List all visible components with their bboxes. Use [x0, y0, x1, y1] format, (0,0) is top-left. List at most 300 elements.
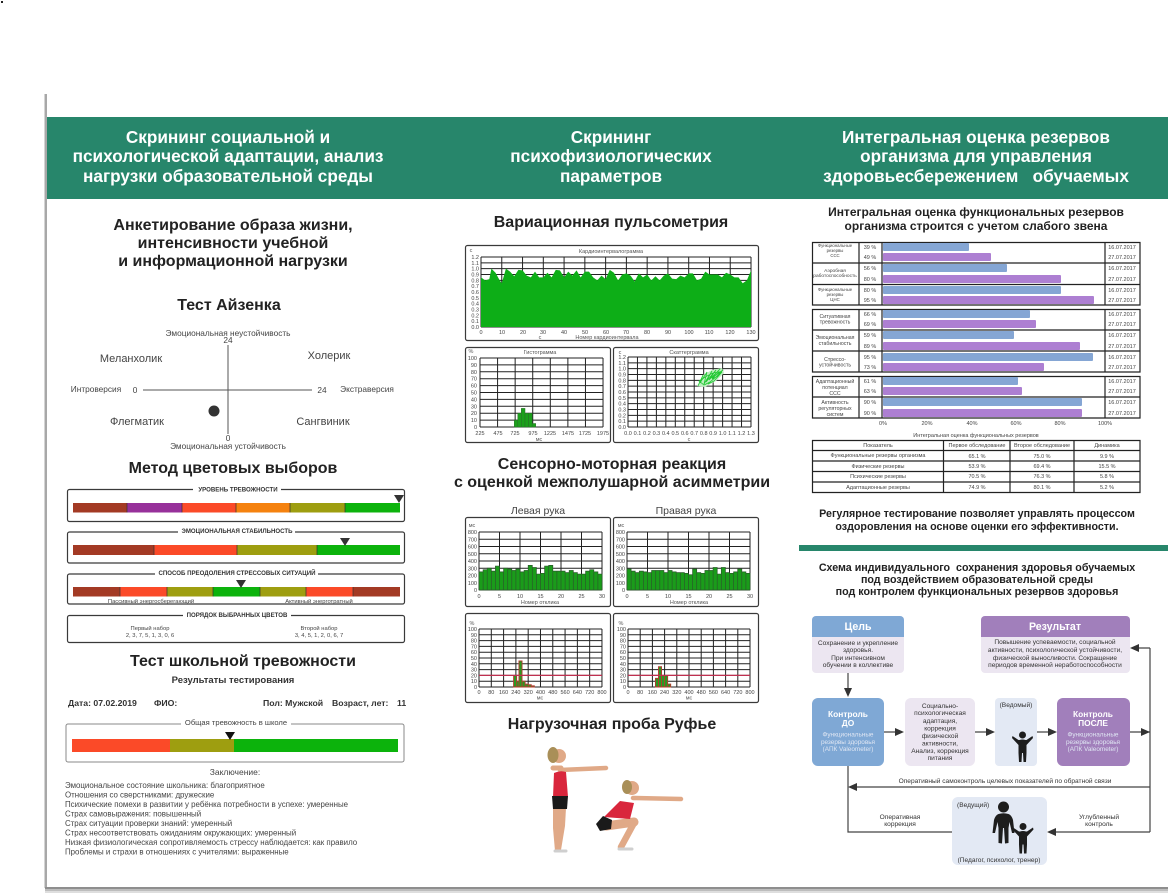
chart: left hand histogram: 240 — [511, 690, 520, 696]
marker: result dot — [208, 406, 220, 416]
bars: second survey — [883, 253, 1094, 417]
chart: right hand reaction times: 15 — [685, 594, 692, 600]
chart: scattergram: с — [619, 350, 622, 356]
label: deep control: контроль — [1085, 821, 1113, 828]
box: correction activities: физической — [922, 732, 959, 740]
heading: Ruffier load test: Нагрузочная проба Руфье — [508, 716, 716, 733]
dates: 16.07.2017 — [1108, 400, 1136, 406]
chart: right hand histogram: % — [619, 621, 624, 627]
row labels: ЦНС — [830, 297, 840, 302]
chart: left hand histogram: 560 — [561, 690, 570, 696]
chart: right hand reaction times: 5 — [646, 594, 649, 600]
chart: cardiointervalogram: с — [470, 248, 473, 254]
chart: right hand histogram: 80 — [620, 639, 626, 645]
panel: anxiety level: УРОВЕНЬ ТРЕВОЖНОСТИ — [198, 486, 278, 494]
icon: child — [1012, 732, 1033, 762]
row labels: регуляторных — [818, 406, 852, 412]
chart: scattergram: 0.4 — [618, 402, 626, 408]
label: left hand: Левая рука — [511, 505, 565, 517]
chart: left hand reaction times: 700 — [468, 537, 477, 543]
box: result: Результат — [1029, 621, 1081, 633]
chart: histogram: 30 — [471, 404, 477, 410]
dates: 27.07.2017 — [1108, 277, 1136, 283]
chart: scattergram: 0.7 — [618, 384, 626, 390]
chart: scattergram: 1.1 — [728, 431, 736, 437]
chart: right hand reaction times: 25 — [726, 594, 733, 600]
box: correction activities: Анализ, коррекция — [911, 748, 969, 755]
chart: right hand reaction times: 30 — [747, 594, 753, 600]
chart: left hand histogram: 10 — [471, 679, 477, 685]
header: column 3: Интегральная оценка резервов — [842, 127, 1110, 147]
marker: stability triangle — [340, 538, 350, 546]
table: integral reserves: 5.2 % — [1100, 485, 1114, 491]
text: conclusion: Заключение: — [210, 767, 260, 777]
heading: pulse variation: Вариационная пульсометрия — [494, 214, 728, 231]
table: integral reserves: 74.9 % — [968, 485, 986, 491]
heading: scheme: Схема индивидуального сохранения здоровья обучаемых — [819, 562, 1135, 574]
axis: 100% — [1098, 421, 1112, 427]
icon: adult — [992, 802, 1014, 844]
chart: histogram: 60 — [471, 384, 477, 390]
box: correction activities — [905, 698, 975, 766]
row labels: устойчивость — [819, 362, 851, 368]
chart: left hand histogram: 160 — [499, 690, 508, 696]
chart: histogram: 1975 — [597, 431, 609, 437]
heading: integral assessment: организма строится с учетом слабого звена — [845, 219, 1108, 233]
chart: cardiointervalogram: 0.1 — [471, 319, 479, 325]
box: goal: При интенсивном — [831, 655, 885, 662]
box: control before: резервы здоровья — [821, 739, 876, 746]
chart: left hand histogram: % — [470, 621, 475, 627]
chart: left hand histogram: 70 — [471, 644, 477, 650]
heading: integral assessment: Интегральная оценка функциональных резервов — [828, 205, 1124, 219]
chart: Eysenck circle axes: Холерик — [308, 350, 351, 362]
chart: histogram: 475 — [493, 431, 503, 437]
heading: hemispheric asymmetry: с оценкой межполушарной асимметрии — [454, 474, 770, 491]
box: result — [981, 616, 1130, 673]
text: conclusion: Психические помехи в развитии у ребёнка потребности в успехе: умеренные — [65, 800, 349, 809]
chart: left hand histogram: 0 — [474, 685, 477, 691]
chart: scattergram: 0.2 — [618, 413, 626, 419]
label: operative correction: коррекция — [884, 821, 916, 828]
chart: cardiointervalogram: 0.4 — [471, 302, 479, 308]
label: feedback: Оперативный самоконтроль целевых показателей по обратной связи — [899, 777, 1112, 785]
chart: right hand reaction times: Номер отклика — [670, 600, 709, 606]
axis: 40% — [966, 421, 978, 427]
chart: cardiointervalogram: 50 — [582, 330, 588, 336]
diagram: health reserve control scheme — [812, 616, 1150, 865]
panel: stress coping: СПОСОБ ПРЕОДОЛЕНИЯ СТРЕССОВЫХ СИТУАЦИЙ — [159, 569, 315, 577]
chart: Eysenck circle axes: Эмоциональная неустойчивость — [166, 328, 290, 338]
text: conclusion: Проблемы и страхи в отношениях с учителями: выраженные — [65, 848, 289, 856]
header: column 1: Скрининг социальной и — [126, 127, 330, 147]
chart: right hand histogram: 400 — [684, 690, 694, 696]
chart: left hand reaction times: 400 — [468, 559, 477, 565]
percent values: 90 % — [864, 400, 876, 406]
percent values: 89 % — [864, 344, 876, 350]
row labels: Функциональные — [818, 287, 853, 292]
chart: cardiointervalogram: 70 — [623, 330, 629, 336]
label: deep control: Углубленный — [1079, 813, 1119, 821]
chart: cardiointervalogram — [466, 246, 758, 341]
chart: left hand reaction times: 15 — [537, 594, 544, 600]
label: right hand: Правая рука — [656, 505, 717, 517]
panel: emotional stability — [68, 528, 404, 563]
text: respondent info — [68, 698, 406, 708]
chart: right hand histogram: мс — [686, 696, 693, 702]
box: control before: ДО — [842, 718, 855, 728]
chart: Eysenck circle axes — [71, 328, 394, 451]
chart: cardiointervalogram: 60 — [603, 330, 609, 336]
chart: left hand histogram: 20 — [471, 673, 477, 679]
row labels: Адаптационный — [816, 378, 854, 385]
header: column 2: Скрининг — [571, 127, 651, 147]
chart: right hand histogram: 30 — [620, 668, 626, 674]
header: column 1: нагрузки образовательной среды — [83, 166, 373, 186]
dates: 27.07.2017 — [1108, 255, 1136, 261]
chart: cardiointervalogram: 30 — [540, 330, 546, 336]
percent values: 69 % — [864, 322, 876, 328]
chart: cardiointervalogram: 110 — [705, 330, 713, 336]
box: correction activities: психологическая — [914, 710, 966, 717]
chart: cardiointervalogram: 10 — [499, 330, 505, 336]
row labels: резервы — [827, 292, 843, 297]
panel: stress coping: Пассивный энергосберегающий — [108, 598, 194, 605]
percent values: 56 % — [864, 266, 876, 272]
header: column 3: здоровьесбережением обучаемых — [823, 166, 1129, 186]
chart: scattergram: 0.4 — [662, 431, 670, 437]
row labels: Ситуативная — [820, 314, 851, 320]
row labels: Аэробная — [824, 268, 846, 274]
chart: right hand reaction times: 700 — [616, 537, 625, 543]
table: integral reserves: 70.5 % — [968, 474, 986, 480]
percent values: 61 % — [864, 379, 876, 385]
chart: histogram: 20 — [471, 411, 477, 417]
row labels: Эмоциональная — [816, 335, 855, 341]
chart: left hand reaction times: 0 — [477, 594, 481, 600]
chart: histogram: 1475 — [562, 431, 574, 437]
box: result: периодов временной неработоспособности — [988, 661, 1122, 669]
chart: right hand reaction times — [614, 518, 758, 606]
table: integral reserves: 69.4 % — [1033, 464, 1051, 470]
text: conclusion: Страх несоответствовать ожиданиям окружающих: умеренный — [65, 828, 296, 838]
chart: cardiointervalogram: с — [539, 335, 542, 341]
box: goal: обучении в коллективе — [823, 661, 894, 669]
chart: scattergram: 1.1 — [618, 361, 626, 367]
dates: 16.07.2017 — [1108, 312, 1136, 318]
box: correction activities: адаптация, — [923, 718, 957, 725]
chart: left hand histogram — [466, 614, 610, 702]
percent values — [864, 245, 876, 417]
chart: scattergram: 0.3 — [618, 408, 626, 414]
heading: school anxiety test: Тест школьной тревожности — [130, 653, 356, 670]
table: integral reserves: 5.8 % — [1100, 474, 1114, 480]
marker: coping triangle — [236, 580, 246, 588]
table: integral reserves: Физические резервы — [851, 464, 905, 470]
box: follower: (Ведомый) — [1000, 701, 1032, 709]
chart: scattergram: Скаттерграмма — [669, 350, 710, 356]
illustration: squat exercise — [548, 747, 681, 851]
chart: right hand histogram: 70 — [620, 644, 626, 650]
chart: right hand reaction times: 0 — [625, 594, 629, 600]
chart: scattergram: 0.8 — [618, 378, 626, 384]
dates: 27.07.2017 — [1108, 298, 1136, 304]
chart: scattergram: 0.7 — [690, 431, 698, 437]
box: control after — [1057, 698, 1130, 766]
chart: right hand histogram: 40 — [620, 662, 626, 668]
box: control before: Контроль — [828, 709, 868, 719]
figure: standing woman — [548, 747, 606, 851]
box: goal: здоровья. — [843, 647, 873, 654]
chart: cardiointervalogram: 0.0 — [471, 325, 479, 331]
chart: histogram: 40 — [471, 397, 477, 403]
chart: right hand reaction times: 10 — [665, 594, 671, 600]
chart: left hand histogram: 640 — [573, 690, 582, 696]
chart: right hand histogram — [614, 614, 758, 702]
text: regular testing note: Регулярное тестирование позволяет управлять процессом — [819, 508, 1135, 520]
heading: lifestyle survey: Анкетирование образа жизни, — [113, 217, 353, 234]
header: column 2: психофизиологических — [510, 146, 712, 166]
chart: left hand histogram: 40 — [471, 662, 477, 668]
chart: cardiointervalogram: 0.9 — [471, 272, 479, 278]
box: control after: (АПК Valeometer) — [1068, 746, 1118, 753]
chart: histogram: 10 — [471, 418, 477, 424]
header band — [47, 117, 1168, 199]
table: integral reserves: 65.1 % — [968, 454, 986, 460]
chart: right hand histogram: 560 — [709, 690, 718, 696]
chart: histogram: 1225 — [544, 431, 556, 437]
text: regular testing note: оздоровления на основе оценки его эффективности. — [835, 521, 1119, 533]
chart: right hand reaction times: 300 — [616, 566, 625, 572]
chart: right hand reaction times: 600 — [616, 544, 625, 550]
panel: stress coping — [68, 569, 404, 605]
box: goal — [812, 616, 904, 673]
text: conclusion — [65, 767, 358, 856]
header: column 2: параметров — [560, 166, 662, 186]
chart: left hand reaction times: 600 — [468, 544, 477, 550]
chart: Eysenck circle axes: 0 — [226, 433, 231, 443]
chart: left hand reaction times: 0 — [474, 588, 477, 594]
chart: left hand histogram: 60 — [471, 650, 477, 656]
chart: right hand histogram: 720 — [733, 690, 742, 696]
chart: right hand histogram: 20 — [620, 673, 626, 679]
chart: scattergram: 0.6 — [681, 431, 689, 437]
chart: scattergram: 0.8 — [700, 431, 708, 437]
row labels: тревожность — [820, 320, 851, 326]
chart: histogram: 90 — [471, 363, 477, 369]
chart: left hand reaction times: 300 — [468, 566, 477, 572]
chart: right hand reaction times: 200 — [616, 574, 625, 580]
text: respondent info: ФИО: — [154, 698, 177, 708]
chart: right hand reaction times: 100 — [616, 581, 625, 587]
chart: cardiointervalogram: 0.3 — [471, 308, 479, 314]
panel: chosen colors order — [68, 612, 404, 642]
row labels: Стрессо- — [824, 357, 846, 363]
heading: lifestyle survey: интенсивности учебной — [138, 235, 328, 252]
box: goal: Сохранение и укрепление — [818, 640, 898, 647]
percent values: 95 % — [864, 355, 876, 361]
chart: left hand histogram: 800 — [597, 690, 607, 696]
box: control after: Контроль — [1073, 709, 1113, 719]
chart: left hand histogram: 400 — [536, 690, 545, 696]
chart: histogram: 80 — [471, 370, 477, 376]
box: follower — [995, 698, 1037, 766]
chart: right hand reaction times: 800 — [616, 530, 625, 536]
chart: scattergram: 0.9 — [618, 372, 626, 378]
chart: histogram — [466, 348, 610, 443]
table: integral reserves: 76.3 % — [1033, 474, 1051, 480]
chart: histogram: % — [469, 349, 474, 355]
chart: right hand reaction times: 400 — [616, 559, 625, 565]
chart: histogram: мс — [536, 437, 543, 443]
percent values: 80 % — [864, 277, 876, 283]
chart: cardiointervalogram: 20 — [520, 330, 526, 336]
chart: right hand histogram: 60 — [620, 650, 626, 656]
chart: cardiointervalogram: 90 — [665, 330, 671, 336]
chart: scattergram: 0.6 — [618, 390, 626, 396]
dates: 27.07.2017 — [1108, 344, 1136, 350]
table: integral reserves: Адаптационные резервы — [846, 485, 910, 491]
table: integral reserves: 80.1 % — [1033, 485, 1051, 491]
chart: right hand histogram: 90 — [620, 633, 626, 639]
panel: chosen colors order: ПОРЯДОК ВЫБРАННЫХ ЦВЕТОВ — [187, 612, 288, 619]
row labels: резервы — [827, 248, 843, 253]
chart: left hand reaction times: 800 — [468, 530, 477, 536]
chart: cardiointervalogram: Номер кардиоинтервала — [575, 335, 640, 341]
chart: right hand histogram: 240 — [660, 690, 669, 696]
box: control before — [812, 698, 884, 766]
chart: cardiointervalogram: 130 — [746, 330, 756, 336]
chart: scattergram: 0.9 — [709, 431, 717, 437]
chart: left hand reaction times: 200 — [468, 574, 477, 580]
chart: right hand reaction times: 20 — [706, 594, 712, 600]
axis: 20% — [921, 421, 933, 427]
box: result: физической выносливости. Сокращение — [993, 654, 1117, 662]
chart: right hand reaction times: 500 — [616, 552, 625, 558]
chart: cardiointervalogram: 80 — [644, 330, 650, 336]
heading: sensorimotor reaction: Сенсорно-моторная реакция — [498, 456, 726, 473]
percent values: 66 % — [864, 312, 876, 318]
chart: histogram: 70 — [471, 377, 477, 383]
chart: left hand histogram: 90 — [471, 633, 477, 639]
label: operative correction: Оперативная — [880, 814, 921, 821]
box: control after: резервы здоровья — [1066, 739, 1121, 746]
chart: left hand reaction times: Номер отклика — [521, 600, 560, 606]
chart: cardiointervalogram: 1.1 — [471, 261, 479, 267]
panel: chosen colors order: 2, 3, 7, 5, 1, 3, 0, 6 — [126, 633, 174, 639]
box: result: Повышение успеваемости, социальной — [994, 638, 1116, 646]
chart: histogram: 50 — [471, 390, 477, 396]
chart: scattergram: 1.0 — [618, 367, 626, 373]
chart: Eysenck circle axes: 24 — [223, 335, 233, 345]
chart: histogram: 0 — [474, 425, 477, 431]
dates: 16.07.2017 — [1108, 245, 1136, 251]
dates: 27.07.2017 — [1108, 389, 1136, 395]
chart: scattergram: 0.5 — [618, 396, 626, 402]
chart: right hand histogram: 50 — [620, 656, 626, 662]
chart: cardiointervalogram: 0.2 — [471, 313, 479, 319]
table: integral reserves — [812, 440, 1140, 492]
bars: first survey — [883, 243, 1093, 406]
heading: scheme: под воздействием образовательной среды — [861, 574, 1093, 586]
panel: chosen colors order: Второй набор — [301, 625, 337, 632]
chart: scattergram: 0.1 — [634, 431, 641, 437]
chart: left hand histogram: 320 — [524, 690, 533, 696]
marker: school anxiety triangle — [225, 732, 235, 740]
chart: left hand reaction times: 10 — [517, 594, 523, 600]
chart: cardiointervalogram: 120 — [725, 330, 735, 336]
text: respondent info: Возраст, лет: — [332, 698, 389, 708]
axis: 80% — [1054, 421, 1066, 427]
chart: left hand reaction times: 25 — [578, 594, 585, 600]
chart: scattergram: с — [688, 437, 691, 443]
dates: 16.07.2017 — [1108, 333, 1136, 339]
chart: Eysenck circle axes: Флегматик — [110, 416, 164, 428]
chart: scattergram: 1.3 — [747, 431, 755, 437]
box: leader: (Педагог, психолог, тренер) — [958, 857, 1040, 864]
table: integral reserves: 15.5 % — [1098, 464, 1116, 470]
box: correction activities: коррекция — [924, 726, 956, 732]
chart: scattergram: 1.2 — [738, 431, 745, 437]
chart: histogram: 1725 — [579, 431, 591, 437]
box: control before: (АПК Valeometer) — [823, 746, 873, 753]
chart: left hand reaction times: мс — [469, 523, 476, 529]
box: control before: Функциональные — [823, 732, 874, 738]
chart: left hand histogram: 80 — [471, 639, 477, 645]
panel: general school anxiety: Общая тревожность в школе — [185, 718, 287, 727]
chart: cardiointervalogram: 100 — [684, 330, 694, 336]
chart: left hand histogram: 480 — [548, 690, 557, 696]
chart: left hand reaction times: 500 — [468, 552, 477, 558]
chart: cardiointervalogram: 0.7 — [471, 284, 479, 290]
box: control after: Функциональные — [1068, 732, 1119, 738]
chart: right hand histogram: 640 — [721, 690, 730, 696]
chart: cardiointervalogram: 0.5 — [471, 296, 479, 302]
chart: left hand histogram: 720 — [585, 690, 594, 696]
chart: cardiointervalogram: 0.6 — [471, 290, 479, 296]
dates: 16.07.2017 — [1108, 379, 1136, 385]
box: leader — [952, 797, 1047, 865]
chart: histogram: 225 — [475, 431, 485, 437]
table: integral reserves: Второе обследование — [1014, 443, 1070, 449]
chart: right hand histogram: 480 — [697, 690, 706, 696]
box: control after: ПОСЛЕ — [1078, 718, 1108, 728]
text: conclusion: Низкая физиологическая сопротивляемость стрессу наблюдается: как правило — [65, 838, 358, 847]
marker: anxiety triangle — [394, 495, 404, 503]
chart: cardiointervalogram: 1.0 — [471, 267, 479, 273]
chart: right hand histogram: 160 — [648, 690, 657, 696]
chart: right hand histogram: 320 — [672, 690, 681, 696]
table: integral reserves: Функциональные резервы организма — [831, 453, 926, 459]
chart: Eysenck circle axes: Меланхолик — [100, 353, 162, 365]
table: integral reserves: 53.9 % — [968, 464, 986, 470]
chart: scattergram: 0.3 — [653, 431, 660, 437]
row labels: работоспособность — [813, 273, 857, 279]
row labels: систем — [827, 412, 844, 418]
text: conclusion: Страх ситуации проверки знаний: умеренный — [65, 819, 232, 828]
row labels: Активность — [821, 400, 849, 406]
table: integral reserves: Психические резервы — [850, 474, 906, 480]
chart: left hand reaction times: 5 — [498, 594, 501, 600]
box: goal: Цель — [844, 621, 872, 633]
row labels: Функциональные — [818, 243, 853, 248]
percent values: 73 % — [864, 365, 876, 371]
percent values: 80 % — [864, 288, 876, 294]
chart: scattergram: 0.5 — [671, 431, 679, 437]
chart: histogram: 975 — [528, 431, 538, 437]
box: correction activities: активности, — [922, 740, 958, 748]
chart: Eysenck circle axes: Эмоциональная устойчивость — [170, 441, 286, 451]
